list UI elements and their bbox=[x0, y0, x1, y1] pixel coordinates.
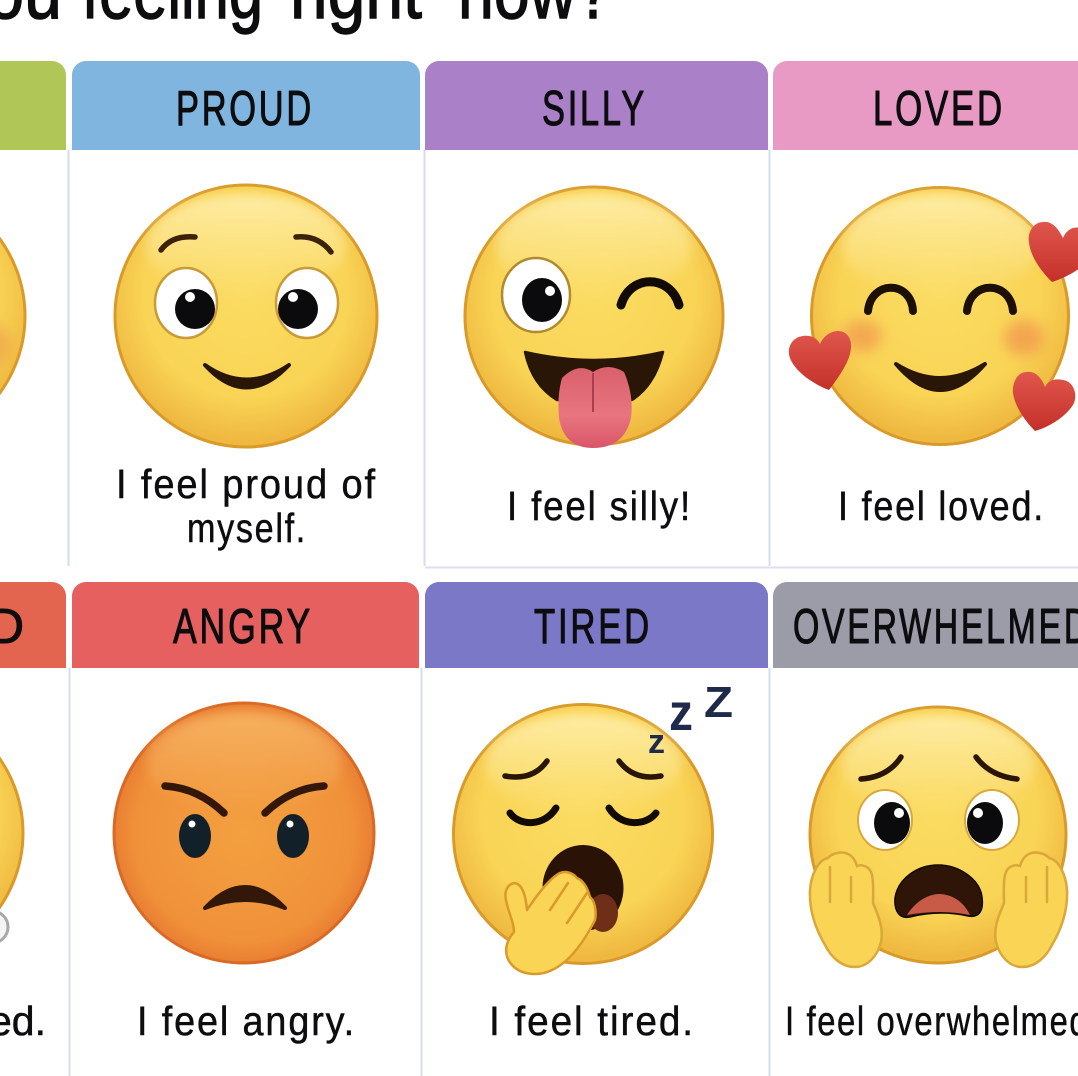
icon: proud face bbox=[115, 185, 377, 447]
caption: proud bbox=[116, 461, 377, 551]
icon: angry face bbox=[114, 703, 374, 963]
icon: yawning hand bbox=[505, 872, 596, 974]
icon: tired face bbox=[454, 678, 733, 974]
icon: sleep zzz: z bbox=[648, 723, 665, 761]
header: tired bbox=[425, 582, 768, 668]
icon: sleep zzz bbox=[648, 678, 733, 761]
header: loved bbox=[773, 61, 1078, 150]
icon: right hand bbox=[995, 853, 1067, 967]
title bbox=[0, 0, 612, 35]
caption: angry: I feel angry. bbox=[137, 998, 356, 1044]
header: silly: SILLY bbox=[542, 82, 647, 136]
header: proud: PROUD bbox=[176, 82, 314, 136]
caption: proud: I feel proud of bbox=[116, 461, 377, 507]
panel: scared (cropped) bbox=[0, 582, 70, 1076]
icon: left hand bbox=[810, 853, 882, 967]
caption: loved: I feel loved. bbox=[838, 483, 1045, 529]
header: overwhelmed bbox=[773, 582, 1078, 668]
panel: angry bbox=[72, 582, 419, 1044]
header: angry: ANGRY bbox=[173, 600, 313, 654]
icon: silly face bbox=[465, 187, 723, 448]
panel: tired bbox=[425, 582, 768, 1044]
panel: proud bbox=[72, 61, 420, 551]
icon: sleep zzz: Z bbox=[704, 678, 733, 727]
icon: loved face bbox=[789, 188, 1078, 444]
icon: overwhelmed face bbox=[810, 707, 1067, 967]
header: angry bbox=[72, 582, 419, 668]
icon: sleep zzz: z bbox=[669, 684, 693, 742]
header: loved: LOVED bbox=[873, 82, 1005, 136]
panel: loved bbox=[773, 61, 1078, 529]
panel: silly bbox=[425, 61, 768, 529]
panel: happy (cropped) bbox=[0, 61, 70, 566]
caption: tired: I feel tired. bbox=[489, 998, 695, 1044]
caption: proud: myself. bbox=[187, 505, 307, 551]
header: tired: TIRED bbox=[534, 600, 652, 654]
header: proud bbox=[72, 61, 420, 150]
panel: overwhelmed bbox=[773, 582, 1078, 1044]
header: silly bbox=[425, 61, 768, 150]
caption: silly: I feel silly! bbox=[507, 483, 692, 529]
